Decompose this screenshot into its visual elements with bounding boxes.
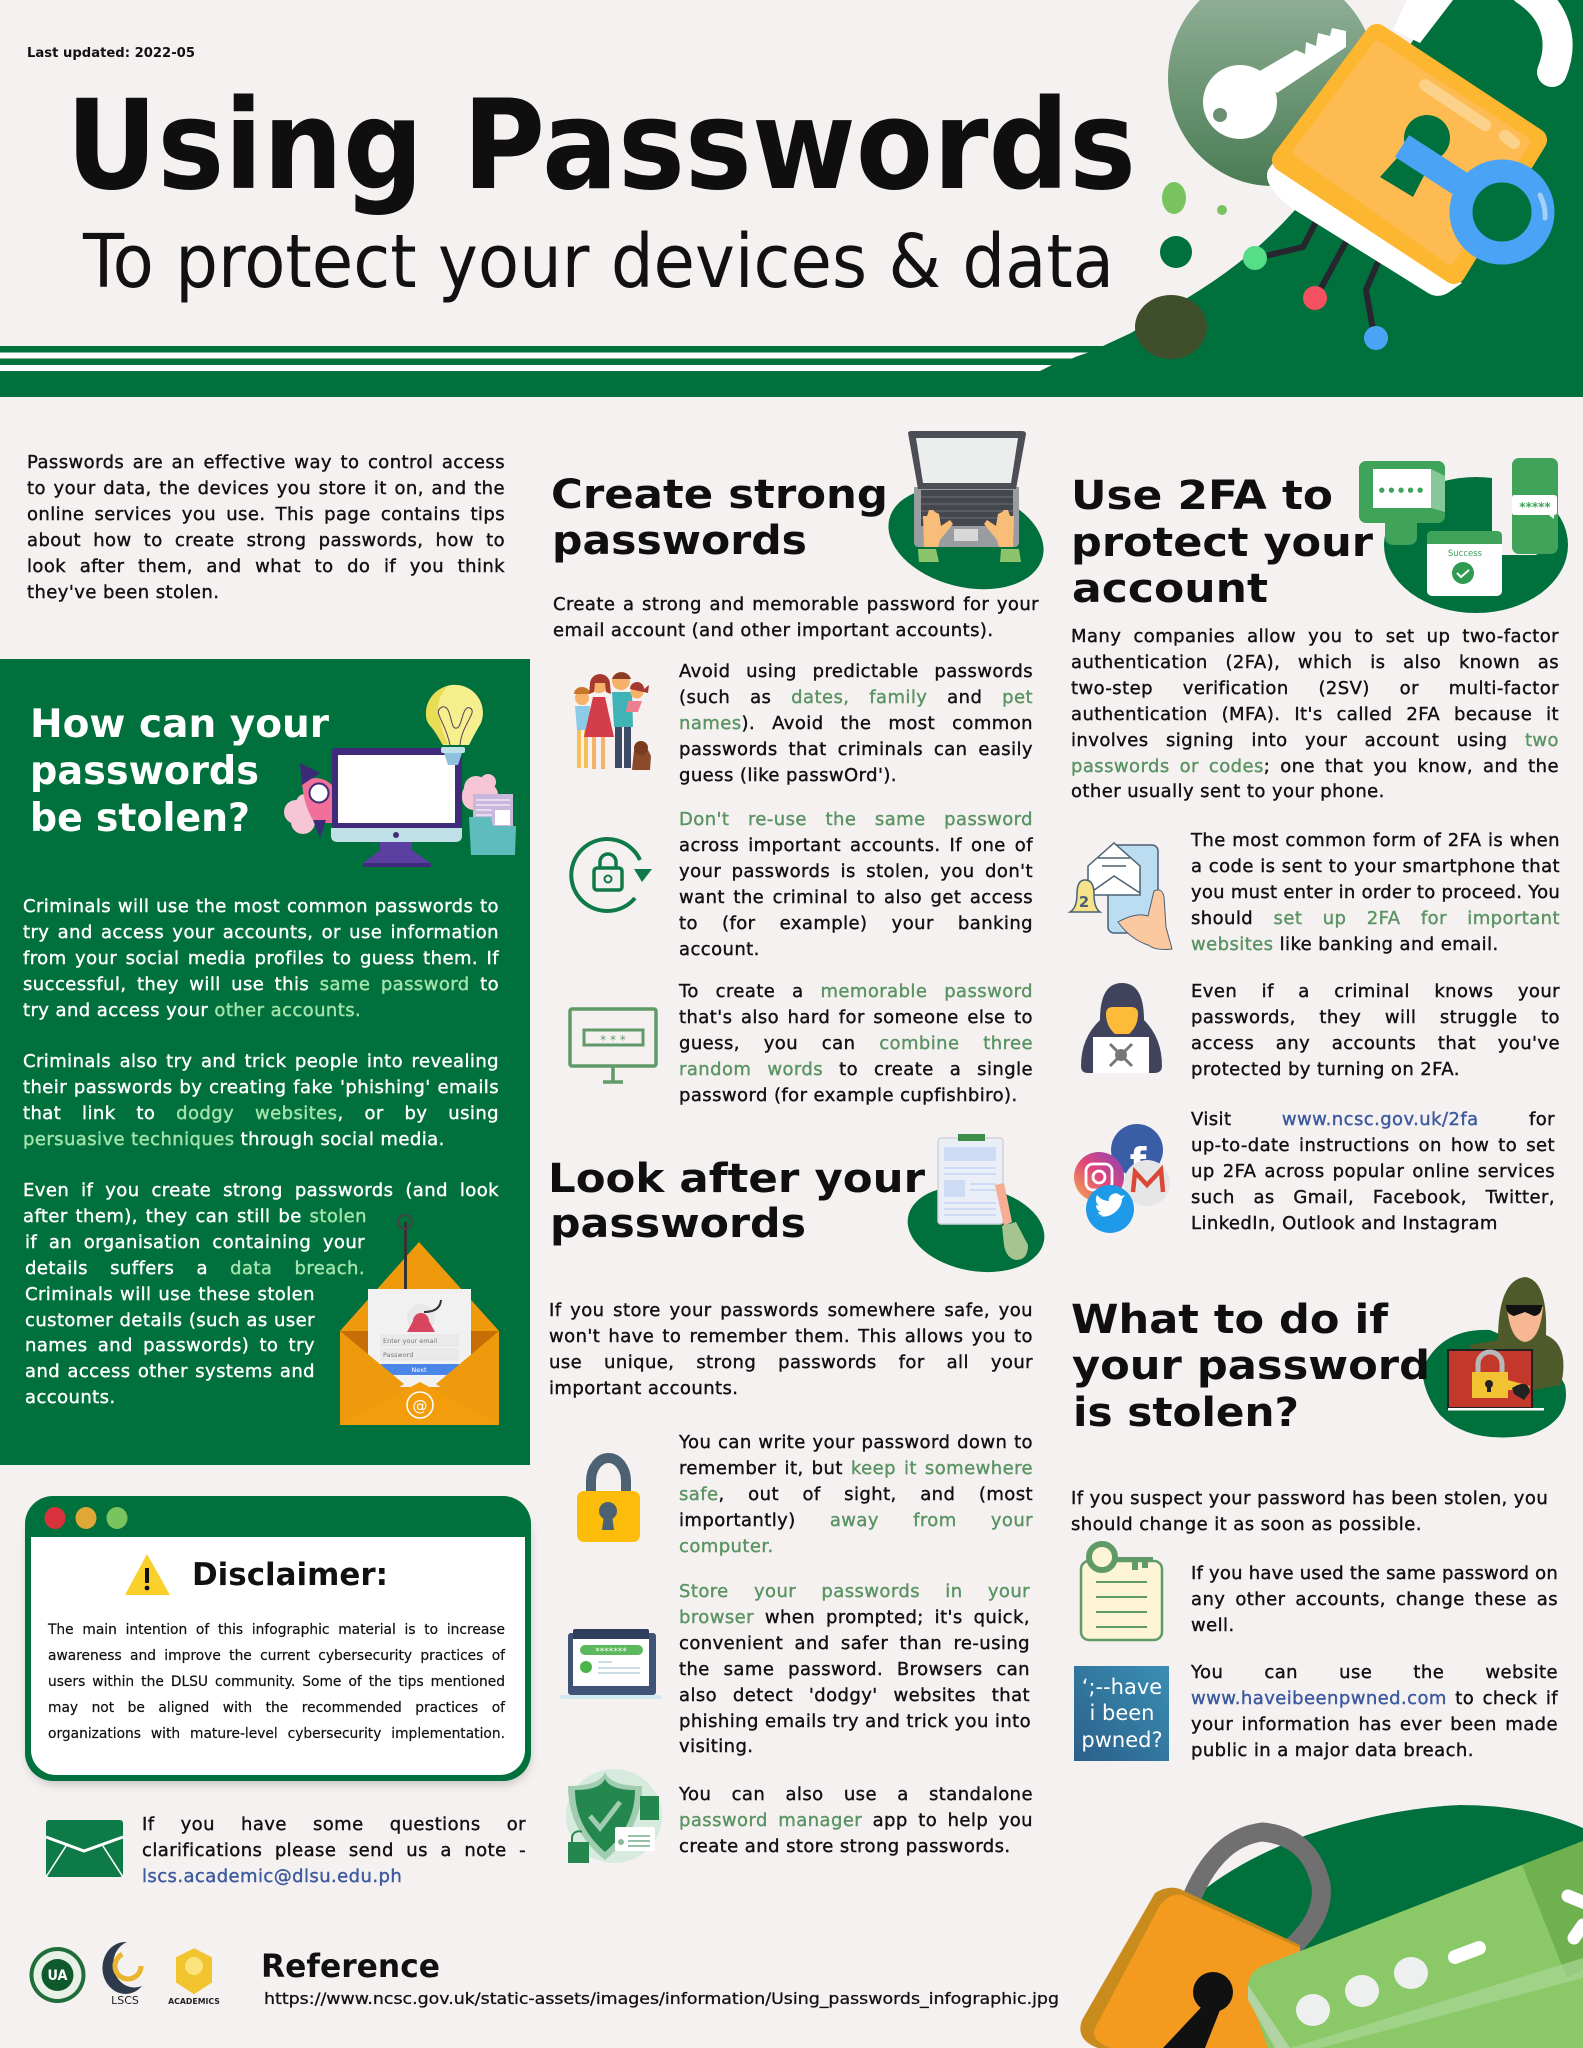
heading: what to do if your password is stolen: your password (1072, 1343, 1430, 1389)
text: memorable password (678, 981, 1033, 1106)
text: code to smartphone: The most common form of 2FA is when (1191, 830, 1560, 851)
heading: how can your passwords be stolen: How can your (30, 702, 330, 747)
text: data breach: customer details (such as user (25, 1310, 315, 1331)
text: haveibeenpwned: public in a major data breach. (1191, 1740, 1474, 1761)
heading: look after your passwords: Look after your (548, 1156, 925, 1202)
text: visit ncsc: up 2FA across popular online services (1191, 1161, 1555, 1182)
text: write it down: remember it, but keep it somewhere (679, 1458, 1033, 1479)
icon: phishing envelope with hook: Password (383, 1351, 413, 1359)
heading: create strong passwords (551, 472, 888, 564)
text: stolen intro (1071, 1488, 1548, 1535)
icon: phishing envelope with hook: Enter your email (383, 1337, 437, 1345)
heading: look after your passwords: passwords (550, 1201, 806, 1247)
icon: have i been pwned logo: i been (1090, 1701, 1154, 1725)
icon: hooded hacker (1081, 983, 1162, 1073)
text: store in browser (679, 1581, 1031, 1757)
text: store in browser: also detect 'dodgy' websites that (679, 1685, 1030, 1706)
text: visit ncsc: such as Gmail, Facebook, Twitter, (1191, 1187, 1555, 1208)
icon: social media logos: f (1130, 1140, 1147, 1184)
text: write it down: importantly) away from your (679, 1510, 1033, 1531)
intro text: to your data, the devices you store it on, and the (27, 478, 505, 499)
text: haveibeenpwned (1190, 1662, 1558, 1761)
text: create strong intro (553, 594, 1039, 641)
text: data breach: names and passwords) to try (25, 1335, 315, 1356)
text: haveibeenpwned: www.haveibeenpwned.com to check if (1191, 1688, 1558, 1709)
text: change other accounts: well. (1191, 1615, 1235, 1636)
intro text: online services you use. This page contains tips (27, 504, 505, 525)
text: stolen intro: If you suspect your password has been stolen, you (1071, 1488, 1548, 1509)
text: code to smartphone: you must enter in order to proceed. You (1191, 882, 1560, 903)
illustration: 2FA devices: ***** (1519, 500, 1551, 514)
text: data breach: and access other systems and (25, 1361, 315, 1382)
logos (30, 1942, 220, 2007)
heading: create strong passwords: Create strong (551, 472, 888, 518)
text: 2FA intro: two-step verification (2SV) or multi-factor (1071, 678, 1559, 699)
text: predictable passwords (678, 661, 1033, 786)
icon: computer with bulb, rocket and folder (284, 685, 516, 867)
text: look after intro (549, 1300, 1033, 1399)
heading: how can your passwords be stolen (30, 702, 330, 841)
text: store in browser: phishing emails try and trick you into (679, 1711, 1031, 1732)
icon: monitor with password field: * * * (600, 1033, 626, 1047)
text: look after intro: use unique, strong passwords for all your (549, 1352, 1033, 1373)
text: visit ncsc: LinkedIn, Outlook and Instagram (1191, 1213, 1498, 1234)
text: 2FA intro (1071, 626, 1559, 802)
disclaimer heading: Disclaimer: (192, 1557, 388, 1593)
window control dots (44, 1507, 128, 1529)
text: criminal struggles: Even if a criminal knows your (1191, 981, 1560, 1002)
text: stolen intro: should change it as soon as possible. (1071, 1514, 1422, 1535)
heading: use 2FA to protect your account: account (1072, 566, 1268, 612)
text: code to smartphone: websites like banking and email. (1191, 934, 1499, 955)
icon: warning triangle (125, 1554, 170, 1595)
text: write it down (678, 1432, 1033, 1557)
intro text (27, 452, 505, 603)
logos: UA (48, 1968, 68, 1984)
text: don't reuse (679, 809, 1034, 960)
text: 2FA intro: authentication (MFA). It's called 2FA because it (1071, 704, 1559, 725)
icon: browser window on laptop: ******* (595, 1647, 627, 1657)
text: disclaimer (48, 1622, 506, 1742)
text: don't reuse: account. (679, 939, 760, 960)
heading: use 2FA to protect your account: Use 2FA to (1071, 473, 1333, 519)
icon: security shield (566, 1769, 662, 1863)
text: visit ncsc: Visit www.ncsc.gov.uk/2fa for (1191, 1109, 1555, 1130)
text: criminal struggles: passwords, they will struggle to (1191, 1007, 1560, 1028)
reference heading: Reference (261, 1947, 440, 1985)
hero illustration: key, padlock and green shape (1030, 0, 1583, 397)
text: create strong intro: email account (and other important accounts). (553, 620, 993, 641)
text: criminals use common passwords: from your social media profiles to guess them. If (23, 948, 499, 969)
text: predictable passwords: names). Avoid the most common (679, 713, 1033, 734)
illustration: laptop with hands (877, 431, 1055, 605)
text: don't reuse: to (for example) your banking (679, 913, 1033, 934)
text: memorable password: password (for example cupfishbiro). (679, 1085, 1018, 1106)
text: 2FA intro: other usually sent to your phone. (1071, 781, 1385, 802)
illustration: 2FA devices (1359, 457, 1568, 613)
text: memorable password: that's also hard for someone else to (679, 1007, 1033, 1028)
text: memorable password: guess, you can combine three (679, 1033, 1033, 1054)
text: phishing: that link to dodgy websites, or by using (23, 1103, 499, 1124)
text: disclaimer: awareness and improve the current cybersecurity practices of (48, 1648, 505, 1664)
text: disclaimer: organizations with mature-level cybersecurity implementation. (48, 1726, 505, 1742)
text: criminal struggles: protected by turning on 2FA. (1191, 1059, 1460, 1080)
intro text: about how to create strong passwords, how to (27, 530, 505, 551)
text: don't reuse: across important accounts. If one of (679, 835, 1033, 856)
text: criminal struggles (1191, 981, 1560, 1080)
text: criminals use common passwords: Criminals will use the most common passwords to (23, 896, 499, 917)
text: store in browser: visiting. (679, 1736, 753, 1757)
subtitle: To protect your devices & data (82, 219, 1114, 305)
text: criminals use common passwords: try and access your accounts, or use information (23, 922, 499, 943)
text: data breach: details suffers a data breach. (25, 1258, 365, 1279)
intro text: they've been stolen. (27, 582, 219, 603)
illustration: clipboard and hand (901, 1134, 1051, 1282)
text: contact note: lscs.academic@dlsu.edu.ph (142, 1866, 402, 1887)
illustration: padlock and password card (1080, 1805, 1583, 2048)
illustration: 2FA devices: Success (1448, 549, 1483, 559)
logos: ACADEMICS (168, 1997, 220, 2006)
text: write it down: You can write your password down to (679, 1432, 1033, 1453)
text: store in browser: the same password. Browsers can (679, 1659, 1030, 1680)
text: code to smartphone: a code is sent to your smartphone that (1191, 856, 1560, 877)
text: criminal struggles: access any accounts that you've (1191, 1033, 1560, 1054)
text: store in browser: convenient and safer than re-using (679, 1633, 1030, 1654)
panel: how can your passwords be stolen (0, 659, 530, 1465)
text: change other accounts: any other accounts, change these as (1191, 1589, 1558, 1610)
text: disclaimer: users within the DLSU community. Some of the tips mentioned (48, 1674, 505, 1690)
text: look after intro: If you store your passwords somewhere safe, you (549, 1300, 1033, 1321)
text: code to smartphone (1190, 830, 1560, 955)
text: store in browser: Store your passwords in your (679, 1581, 1030, 1602)
text: phishing: their passwords by creating fake 'phishing' emails (23, 1077, 499, 1098)
icon: note with key (1081, 1544, 1162, 1640)
icon: have i been pwned logo (1074, 1666, 1169, 1761)
heading: look after your passwords (548, 1156, 925, 1247)
icon: social media logos (1074, 1124, 1170, 1233)
text: haveibeenpwned: You can use the website (1191, 1662, 1558, 1683)
text: memorable password: random words to create a single (679, 1059, 1033, 1080)
last updated date: Last updated: 2022-05 (27, 45, 195, 61)
icon: have i been pwned logo: pwned? (1081, 1728, 1163, 1752)
text: code to smartphone: should set up 2FA for important (1191, 908, 1560, 929)
text: data breach: if an organisation containing your (25, 1232, 365, 1253)
illustration: 2FA devices: ••••• (1377, 482, 1425, 500)
text: password manager: You can also use a standalone (679, 1784, 1033, 1805)
text: disclaimer: may not be aligned with the recommended practices of (48, 1700, 505, 1716)
intro text: look after them, and what to do if you think (27, 556, 505, 577)
text: contact note: If you have some questions or (142, 1814, 526, 1835)
heading: what to do if your password is stolen (1071, 1297, 1430, 1436)
icon: monitor with password field (570, 1009, 656, 1082)
text: predictable passwords: (such as dates, family and pet (679, 687, 1033, 708)
text: password manager: password manager app to help you (679, 1810, 1033, 1831)
logos: LSCS (111, 1994, 139, 2007)
illustration: thief with locked laptop (1422, 1277, 1566, 1438)
text: phishing: persuasive techniques through social media. (23, 1129, 445, 1150)
icon: phishing envelope with hook: @ (412, 1397, 428, 1415)
heading: how can your passwords be stolen: be stolen? (30, 796, 250, 841)
heading: use 2FA to protect your account (1071, 473, 1373, 612)
text: don't reuse: Don't re-use the same password (679, 809, 1033, 830)
intro text: Passwords are an effective way to control access (27, 452, 505, 473)
text: data breach: Even if you create strong passwords (and look (23, 1180, 499, 1201)
icon: mail envelope (46, 1820, 123, 1877)
icon: yellow padlock (577, 1458, 640, 1542)
text: predictable passwords: passwords that criminals can easily (679, 739, 1033, 760)
icon: smartphone notification (1070, 843, 1172, 950)
heading: create strong passwords: passwords (552, 518, 807, 564)
text: password manager (678, 1784, 1033, 1857)
text: don't reuse: want the criminal to also get access (679, 887, 1033, 908)
text: create strong intro: Create a strong and memorable password for your (553, 594, 1039, 615)
text: data breach: Criminals will use these stolen (25, 1284, 315, 1305)
icon: smartphone notification: 2 (1079, 893, 1089, 911)
text: contact note (142, 1814, 526, 1887)
icon: phishing envelope with hook (340, 1215, 499, 1425)
text: predictable passwords: guess (like passwOrd'). (679, 765, 897, 786)
text: memorable password: To create a memorable password (679, 981, 1033, 1002)
icon: padlock with circular arrow (571, 839, 652, 911)
header stripes (0, 346, 1583, 397)
text: predictable passwords: Avoid using predictable passwords (679, 661, 1033, 682)
text: 2FA intro: authentication (2FA), which is also known as (1071, 652, 1559, 673)
icon: browser window on laptop (560, 1629, 662, 1699)
disclaimer card (25, 1496, 531, 1784)
text: criminals use common passwords: successful, they will use this same password to (23, 974, 499, 995)
icon: have i been pwned logo: ‘;--have (1082, 1675, 1162, 1699)
text: look after intro: important accounts. (549, 1378, 738, 1399)
text: look after intro: won't have to remember them. This allows you to (549, 1326, 1033, 1347)
text: store in browser: browser when prompted; it's quick, (679, 1607, 1030, 1628)
text: password manager: create and store strong passwords. (679, 1836, 1011, 1857)
text: 2FA intro: involves signing into your account using two (1071, 730, 1559, 751)
text: write it down: computer. (679, 1536, 774, 1557)
heading: how can your passwords be stolen: passwords (30, 749, 259, 794)
text: haveibeenpwned: your information has ever been made (1191, 1714, 1558, 1735)
icon: phishing envelope with hook: Next (411, 1366, 427, 1374)
text: don't reuse: your passwords is stolen, you don't (679, 861, 1033, 882)
text: data breach (23, 1180, 499, 1408)
text: contact note: clarifications please send us a note - (142, 1840, 526, 1861)
text: visit ncsc (1190, 1109, 1555, 1234)
title: Using Passwords (66, 74, 1136, 218)
text: criminals use common passwords: try and access your other accounts. (23, 1000, 361, 1021)
text: write it down: safe, out of sight, and (most (679, 1484, 1033, 1505)
heading: what to do if your password is stolen: is stolen? (1073, 1390, 1299, 1436)
text: disclaimer: The main intention of this infographic material is to increase (48, 1622, 505, 1638)
text: phishing: Criminals also try and trick people into revealing (23, 1051, 499, 1072)
text: criminals use common passwords (23, 896, 500, 1021)
text: phishing (23, 1051, 499, 1150)
text: data breach: accounts. (25, 1387, 116, 1408)
text: visit ncsc: up-to-date instructions on how to set (1191, 1135, 1555, 1156)
heading: what to do if your password is stolen: What to do if (1071, 1297, 1389, 1343)
reference link: https://www.ncsc.gov.uk/static-assets/images/information/Using_passwords_infographic.jpg (264, 1989, 1059, 2009)
text: 2FA intro: Many companies allow you to set up two-factor (1071, 626, 1559, 647)
icon: family (574, 672, 651, 770)
text: 2FA intro: passwords or codes; one that you know, and the (1071, 756, 1559, 777)
heading: use 2FA to protect your account: protect your (1071, 520, 1373, 566)
text: change other accounts (1191, 1563, 1558, 1636)
text: change other accounts: If you have used the same password on (1191, 1563, 1558, 1584)
text: data breach: after them), they can still be stolen (23, 1206, 367, 1227)
